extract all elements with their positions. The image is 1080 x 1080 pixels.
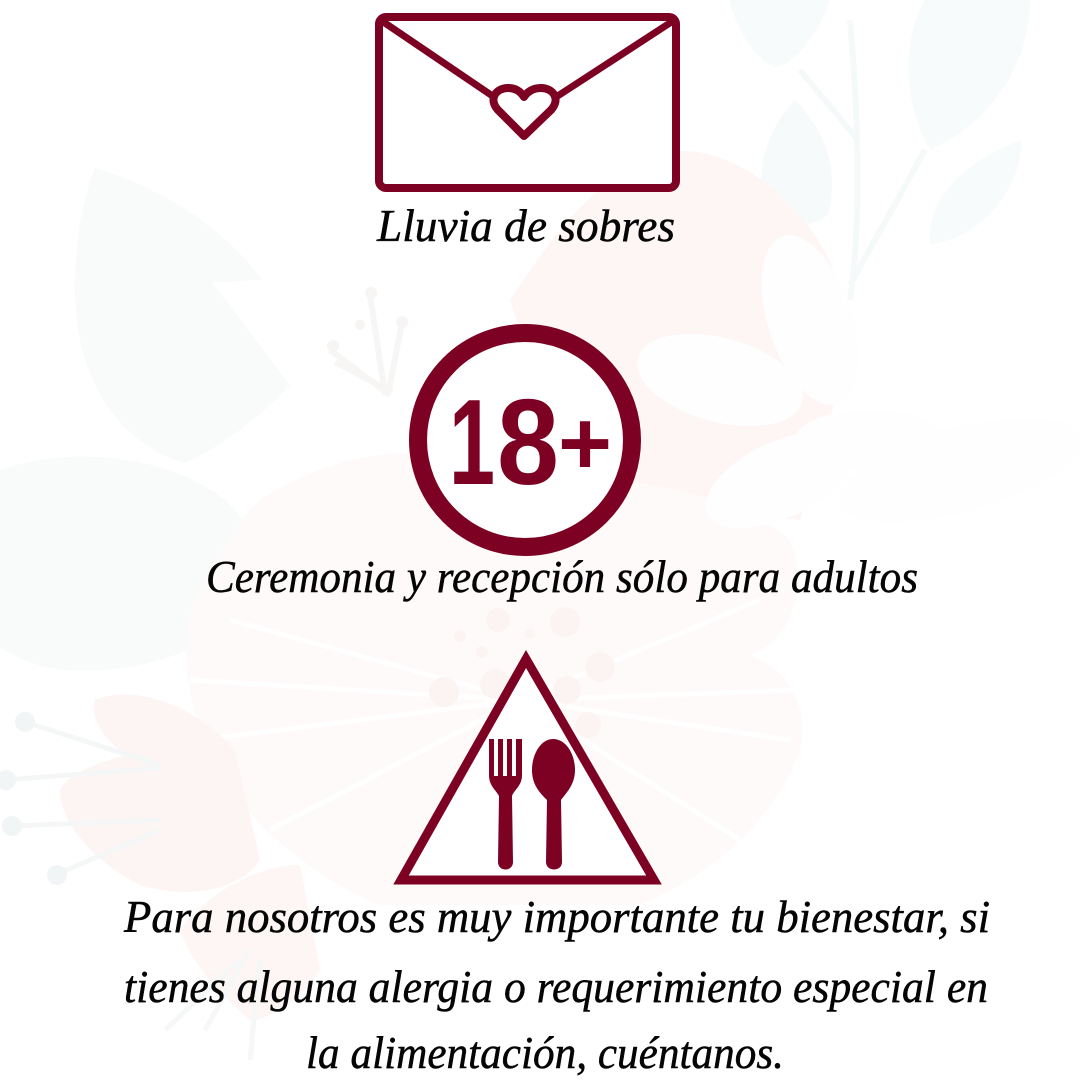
icon: triangle with cutlery [401,659,654,880]
heading: Lluvia de sobres: Lluvia de sobres [376,200,675,251]
text block: dietary note: la alimentación, cuéntanos. [306,1027,784,1078]
icon: 18+ adults only [418,333,632,547]
icon: fork [489,739,522,870]
text block: dietary note: Para nosotros es muy importante tu bienestar, si [123,891,990,942]
icon: envelope with heart [379,17,676,188]
text block: dietary note: tienes alguna alergia o requerimiento especial en [124,961,988,1012]
icon: 18+ adults only: 8 [497,374,559,510]
icon: spoon [532,739,575,870]
icon: 18+ adults only: + [558,394,612,494]
heading: adults only ceremony: Ceremonia y recepción sólo para adultos [206,551,918,602]
icon: 18+ adults only: 1 [449,374,495,510]
text block: dietary note [123,891,990,1078]
